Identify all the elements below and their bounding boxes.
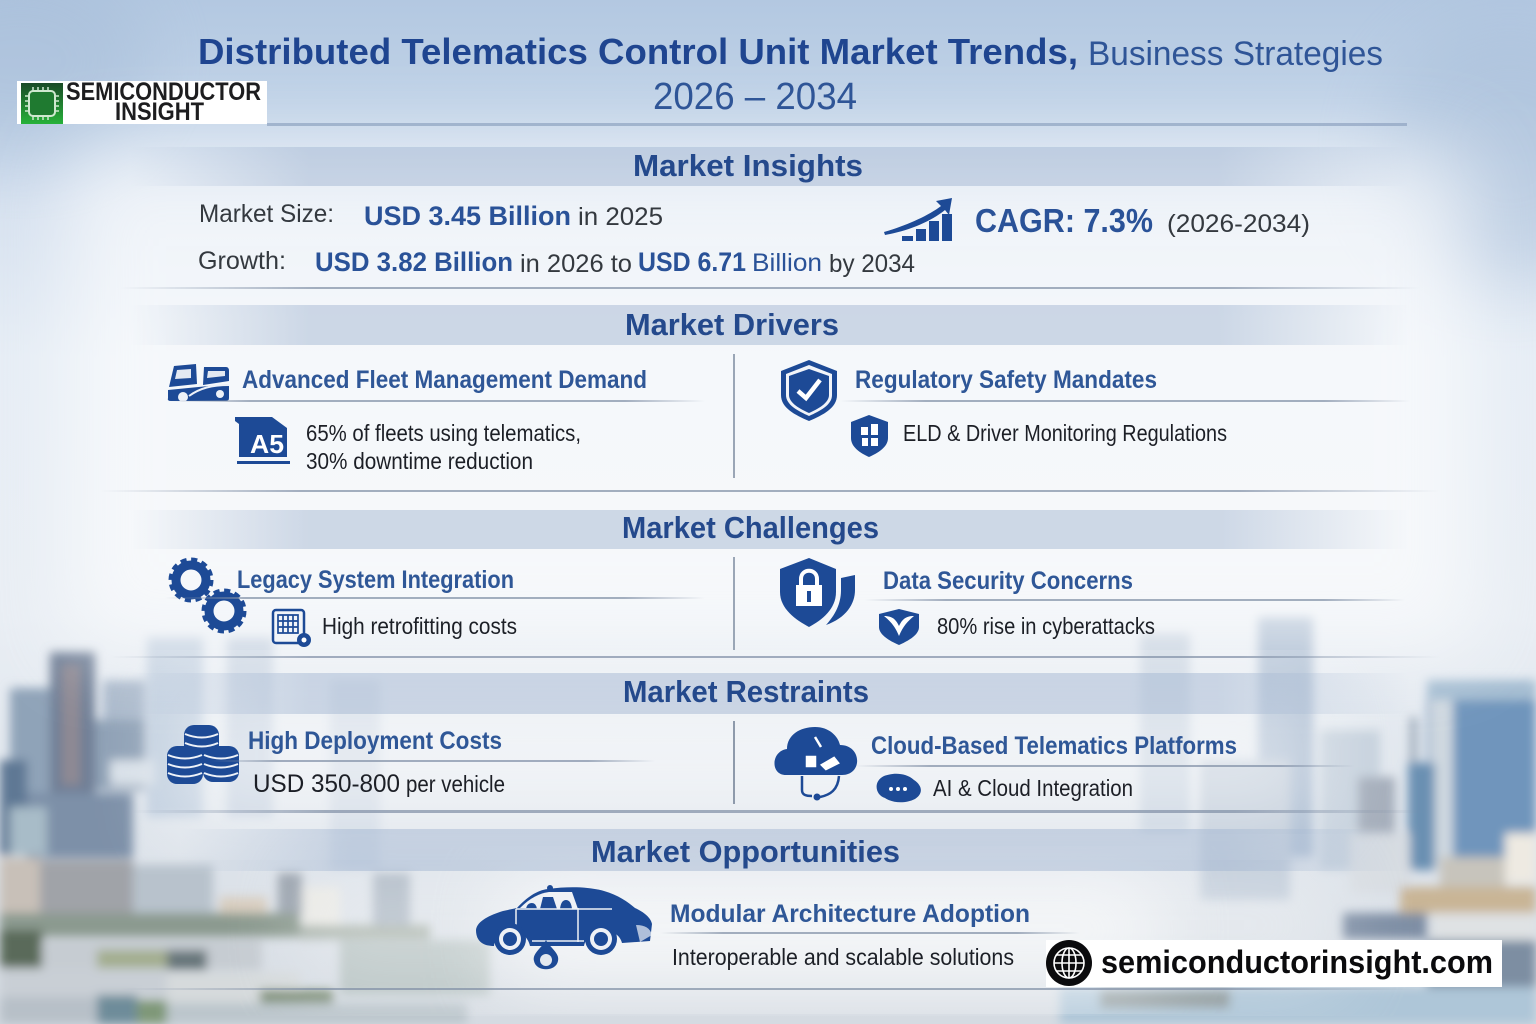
heading: market insights: Market Insights [633,148,863,183]
market size row [199,200,663,231]
driver stats text: 30% downtime reduction [306,448,533,474]
market size row: USD 3.45 Billion [364,201,571,231]
icon: growth chart arrow [884,198,952,241]
CAGR value: CAGR: 7.3% [975,202,1153,239]
logo: Semiconductor Insight: SEMICONDUCTOR [66,78,261,106]
icon: shield check [781,360,837,421]
challenge: data security concerns [780,558,1405,645]
panel: market opportunities [180,829,1410,970]
icon: A5 document: A5 [250,429,284,459]
heading band: market opportunities [180,829,1410,871]
challenge text: High retrofitting costs [322,613,517,639]
heading band: market drivers [130,305,1410,345]
icon: globe [1046,940,1092,986]
growth row: Billion [752,249,822,277]
growth row: Growth: [198,247,286,275]
icon: gears [171,560,244,631]
title: 2026 – 2034 [653,76,857,118]
growth row: USD 6.71 [638,247,746,277]
heading: market challenges: Market Challenges [622,510,879,545]
growth row: in 2026 to [520,250,632,278]
logo: Semiconductor Insight: INSIGHT [115,98,204,126]
heading: market restraints: Market Restraints [623,674,869,709]
opportunity text: Interoperable and scalable solutions [672,944,1014,970]
growth row [198,247,915,278]
divider: drivers columns [733,354,735,478]
title: Business Strategies [1088,35,1383,73]
driver: regulatory safety mandates [781,360,1410,457]
icon: cloud network [774,727,857,800]
driver: advanced fleet management [168,364,705,474]
icon: chat bubble [877,774,921,802]
icon: small cyber shield [879,609,919,645]
icon: fleet truck [168,364,229,402]
divider: challenges columns [733,557,735,650]
challenge: legacy system integration [165,560,705,647]
CAGR value: (2026-2034) [1167,210,1310,238]
heading band: market insights [130,147,1410,186]
restraint: cloud-based telematics platforms [774,727,1355,802]
heading band: market restraints [130,673,1410,714]
restraint text: AI & Cloud Integration [933,775,1133,801]
icon: small shield [851,415,888,457]
logo: Semiconductor Insight [17,78,267,126]
driver stats text [306,420,581,474]
panel: market drivers [100,305,1502,990]
subheading: Regulatory Safety Mandates [855,366,1157,394]
title: Distributed Telematics Control Unit Market Trends, [198,31,1078,72]
divider: restraints columns [733,721,735,804]
subheading: Legacy System Integration [237,566,514,594]
title underline [267,123,1407,126]
subheading: Cloud-Based Telematics Platforms [871,732,1237,760]
icon: green chip [21,83,63,124]
panel: market challenges [110,510,1502,990]
background: translucent content panels [70,150,1470,990]
restraint: high deployment costs [167,725,655,798]
panel: market insights [130,147,1410,278]
icon: connected car [476,885,652,969]
market size row: in 2025 [578,203,663,231]
driver regulation text: ELD & Driver Monitoring Regulations [903,420,1227,446]
growth row: by 2034 [829,250,915,278]
title [198,31,1383,118]
website badge [1046,940,1502,987]
heading: market opportunities: Market Opportunities [591,834,900,869]
restraint text [253,770,505,798]
icon: A5 document [235,417,290,464]
panel: market restraints [120,673,1502,990]
CAGR value [975,202,1310,239]
icon: lock shield [780,558,855,627]
restraint text: per vehicle [406,771,505,797]
subheading: Data Security Concerns [883,567,1133,595]
icon: coin stacks [167,725,239,784]
heading band: market challenges [130,510,1410,549]
icon: retrofit grid [273,610,311,647]
subheading: Advanced Fleet Management Demand [242,366,647,394]
background: blurred city skyline [0,617,1536,1024]
driver stats text: 65% of fleets using telematics, [306,420,581,446]
subheading: Modular Architecture Adoption [670,900,1030,928]
website badge: semiconductorinsight.com [1101,944,1493,980]
subheading: High Deployment Costs [248,727,502,755]
challenge text: 80% rise in cyberattacks [937,613,1155,639]
growth row: USD 3.82 Billion [315,247,513,277]
restraint text: USD 350-800 [253,770,400,798]
market size row: Market Size: [199,200,334,228]
heading: market drivers: Market Drivers [625,307,839,342]
